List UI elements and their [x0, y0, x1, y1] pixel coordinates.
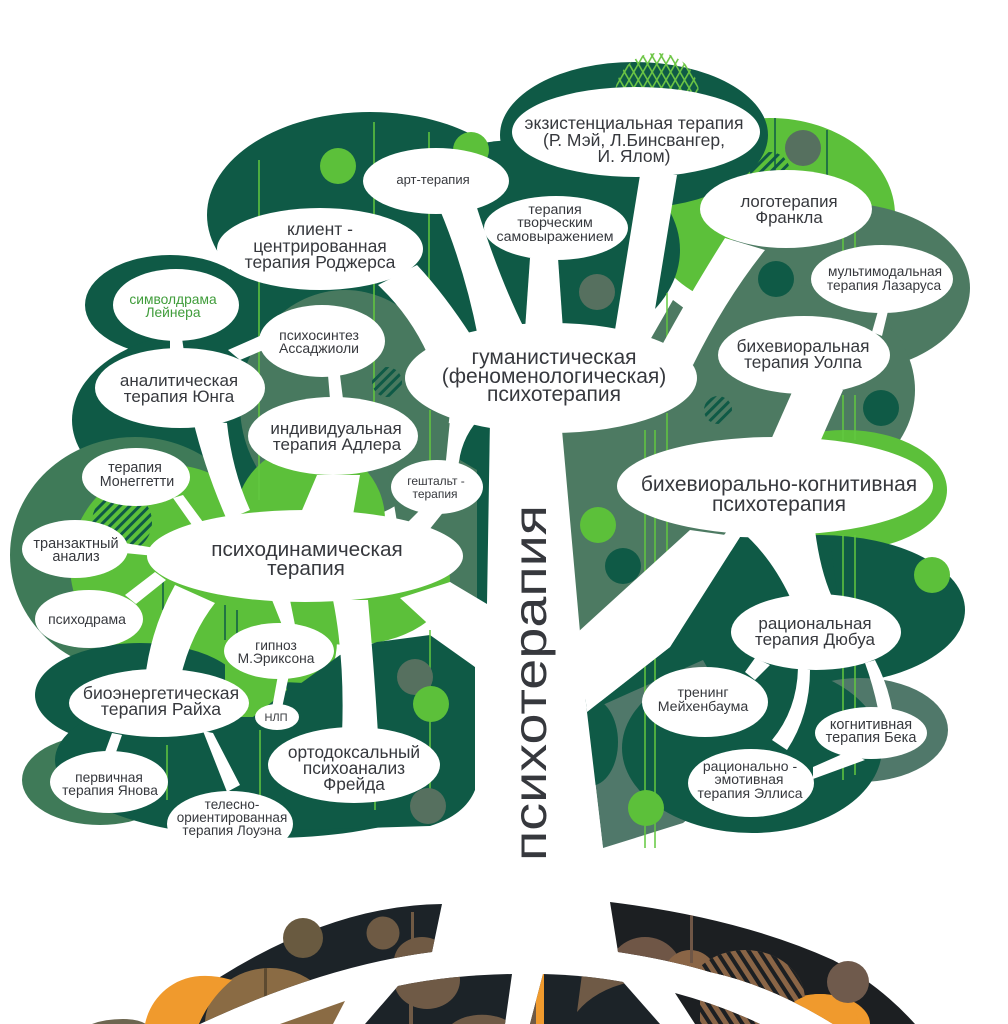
node: мультимодальная терапия Лазаруса: терапия Лазаруса — [827, 278, 941, 293]
node: экзистенциальная терапия: экзистенциальная терапия — [525, 113, 743, 133]
node: индивидуальная терапия Адлера: терапия Адлера — [273, 435, 402, 454]
node: тренинг Мейхенбаума: тренинг — [677, 685, 729, 701]
node: терапия Монеггетти — [82, 448, 190, 506]
node: терапия творческим самовыражением: самовыражением — [497, 229, 613, 245]
accent lines — [167, 122, 855, 848]
node: психодрама — [35, 590, 143, 648]
node: рациональная терапия Дюбуа — [731, 594, 901, 670]
root segment: centre left — [365, 974, 512, 1024]
node: когнитивная терапия Бека — [815, 707, 927, 759]
node: рациональная терапия Дюбуа: рациональная — [758, 614, 872, 633]
node: гипноз М.Эриксона — [224, 623, 334, 679]
node: аналитическая терапия Юнга: аналитическая — [120, 371, 238, 390]
node: НЛП: НЛП — [264, 712, 288, 724]
foliage: dark lower right — [562, 663, 882, 833]
decorative orange and brown blobs left — [92, 976, 232, 1024]
root circles left — [283, 916, 400, 958]
node: символдрама Лейнера: Лейнера — [145, 305, 201, 320]
node: арт-терапия — [363, 148, 509, 214]
node: терапия творческим самовыражением: терапия — [528, 202, 582, 218]
node: гештальт-терапия: гештальт - — [407, 474, 465, 488]
node: экзистенциальная терапия: И. Ялом) — [598, 146, 670, 166]
node: бихевиоральная терапия Уолпа: терапия Уолпа — [744, 352, 862, 372]
node: ортодоксальный психоанализ Фрейда: психоанализ — [303, 758, 405, 778]
node: бихевиорально-когнитивная психотерапия: бихевиорально-когнитивная — [641, 473, 917, 496]
node: ортодоксальный психоанализ Фрейда — [268, 727, 440, 803]
node: арт-терапия: арт-терапия — [396, 172, 470, 187]
dark accent lines — [163, 118, 827, 650]
foliage: medium lower right — [587, 660, 948, 848]
node: НЛП — [255, 704, 299, 730]
foliage: dark right — [587, 535, 965, 712]
node: ортодоксальный психоанализ Фрейда: Фрейда — [323, 774, 385, 794]
foliage: bright right — [743, 430, 947, 550]
node: когнитивная терапия Бека: терапия Бека — [826, 730, 917, 746]
node: гипноз М.Эриксона: М.Эриксона — [238, 651, 315, 666]
node: психодинамическая терапия: терапия — [267, 557, 345, 580]
node: рационально-эмотивная терапия Эллиса: рационально - — [703, 758, 797, 774]
decorative circles — [320, 130, 950, 826]
node: тренинг Мейхенбаума: Мейхенбаума — [658, 699, 748, 715]
root segment: right ring — [605, 900, 925, 1024]
node: индивидуальная терапия Адлера: индивидуальная — [270, 419, 402, 438]
root segment: small right — [675, 993, 760, 1024]
node: бихевиорально-когнитивная психотерапия — [617, 437, 933, 535]
hatched circles — [92, 53, 790, 552]
node: транзактный анализ — [22, 520, 128, 578]
node: психосинтез Ассаджиоли: Ассаджиоли — [279, 340, 359, 356]
node: ортодоксальный психоанализ Фрейда: ортодоксальный — [288, 742, 420, 762]
node: аналитическая терапия Юнга — [95, 348, 265, 428]
node: рационально-эмотивная терапия Эллиса: терапия Эллиса — [697, 785, 803, 801]
node: гуманистическая психотерапия — [405, 323, 697, 433]
node: телесно-ориентированная терапия Лоуэна — [167, 791, 293, 857]
node: гуманистическая психотерапия: гуманистическая — [471, 346, 637, 369]
node: биоэнергетическая терапия Райха: биоэнергетическая — [83, 683, 239, 703]
node: клиент-центрированная терапия Роджерса: центрированная — [253, 236, 387, 256]
node: символдрама Лейнера — [113, 269, 239, 341]
node: экзистенциальная терапия — [512, 87, 760, 177]
node: гипноз М.Эриксона: гипноз — [255, 638, 297, 653]
node: рациональная терапия Дюбуа: терапия Дюбуа — [755, 630, 876, 649]
node: бихевиорально-когнитивная психотерапия: психотерапия — [712, 493, 846, 516]
node: символдрама Лейнера: символдрама — [129, 292, 217, 307]
node: гештальт-терапия — [391, 460, 483, 514]
node: клиент-центрированная терапия Роджерса: клиент - — [287, 219, 353, 239]
node: мультимодальная терапия Лазаруса: мультимодальная — [828, 264, 942, 279]
foliage: dark top — [72, 62, 768, 510]
foliage: medium far left — [10, 437, 260, 673]
node: рационально-эмотивная терапия Эллиса: эмотивная — [714, 771, 784, 787]
node: логотерапия Франкла: Франкла — [755, 208, 823, 227]
node: психосинтез Ассаджиоли — [259, 305, 385, 377]
node: телесно-ориентированная терапия Лоуэна: телесно- — [205, 797, 259, 812]
node: психодрама: психодрама — [48, 611, 126, 627]
node: экзистенциальная терапия: (Р. Мэй, Л.Бинсвангер, — [543, 130, 725, 150]
node: телесно-ориентированная терапия Лоуэна: терапия Лоуэна — [182, 823, 282, 838]
node: телесно-ориентированная терапия Лоуэна: ориентированная — [177, 810, 287, 825]
panel: canopy foliage — [10, 62, 970, 848]
foliage: medium centre-left — [240, 290, 490, 608]
node: транзактный анализ: транзактный — [33, 536, 119, 552]
node: биоэнергетическая терапия Райха — [69, 669, 249, 737]
node: гуманистическая психотерапия: (феноменологическая) — [442, 365, 666, 388]
node: логотерапия Франкла — [700, 170, 872, 248]
trunk label: психотерапия — [504, 505, 556, 861]
root circle right — [827, 961, 869, 1003]
node: психодинамическая терапия: психодинамическая — [211, 538, 403, 561]
node: гуманистическая психотерапия: психотерапия — [487, 383, 621, 406]
node: логотерапия Франкла: логотерапия — [740, 192, 838, 211]
node: мультимодальная терапия Лазаруса — [811, 245, 953, 313]
node: психодинамическая терапия — [147, 510, 463, 602]
node: психосинтез Ассаджиоли: психосинтез — [279, 327, 359, 343]
node: когнитивная терапия Бека: когнитивная — [830, 717, 912, 733]
node: рационально-эмотивная терапия Эллиса — [688, 749, 814, 817]
node: терапия творческим самовыражением: творческим — [517, 215, 593, 231]
node: клиент-центрированная терапия Роджерса — [217, 208, 423, 290]
root segment: triangle — [280, 1001, 345, 1024]
node: клиент-центрированная терапия Роджерса: терапия Роджерса — [245, 252, 396, 272]
root segment: centre right — [530, 974, 660, 1024]
node: тренинг Мейхенбаума — [642, 667, 768, 737]
node: первичная терапия Янова: терапия Янова — [62, 783, 158, 798]
node: аналитическая терапия Юнга: терапия Юнга — [124, 387, 235, 406]
node: бихевиоральная терапия Уолпа: бихевиоральная — [737, 336, 869, 356]
node: бихевиоральная терапия Уолпа — [718, 316, 890, 394]
panel: roots — [92, 900, 925, 1024]
node: транзактный анализ: анализ — [52, 549, 100, 565]
node: терапия Монеггетти: Монеггетти — [100, 474, 174, 490]
root segment: left ring — [199, 904, 442, 1024]
node: терапия Монеггетти: терапия — [108, 460, 162, 476]
node: индивидуальная терапия Адлера — [248, 397, 418, 475]
node: терапия творческим самовыражением — [484, 196, 628, 260]
tree trunk and branches — [105, 175, 892, 905]
node: гештальт-терапия: терапия — [412, 487, 458, 501]
foliage: lower left — [22, 635, 485, 838]
node: первичная терапия Янова — [50, 751, 168, 813]
foliage: bright green back right — [645, 118, 895, 312]
foliage: medium right — [562, 203, 970, 640]
node: биоэнергетическая терапия Райха: терапия Райха — [101, 699, 221, 719]
node: первичная терапия Янова: первичная — [75, 770, 143, 785]
foliage: bright green left — [70, 445, 450, 720]
